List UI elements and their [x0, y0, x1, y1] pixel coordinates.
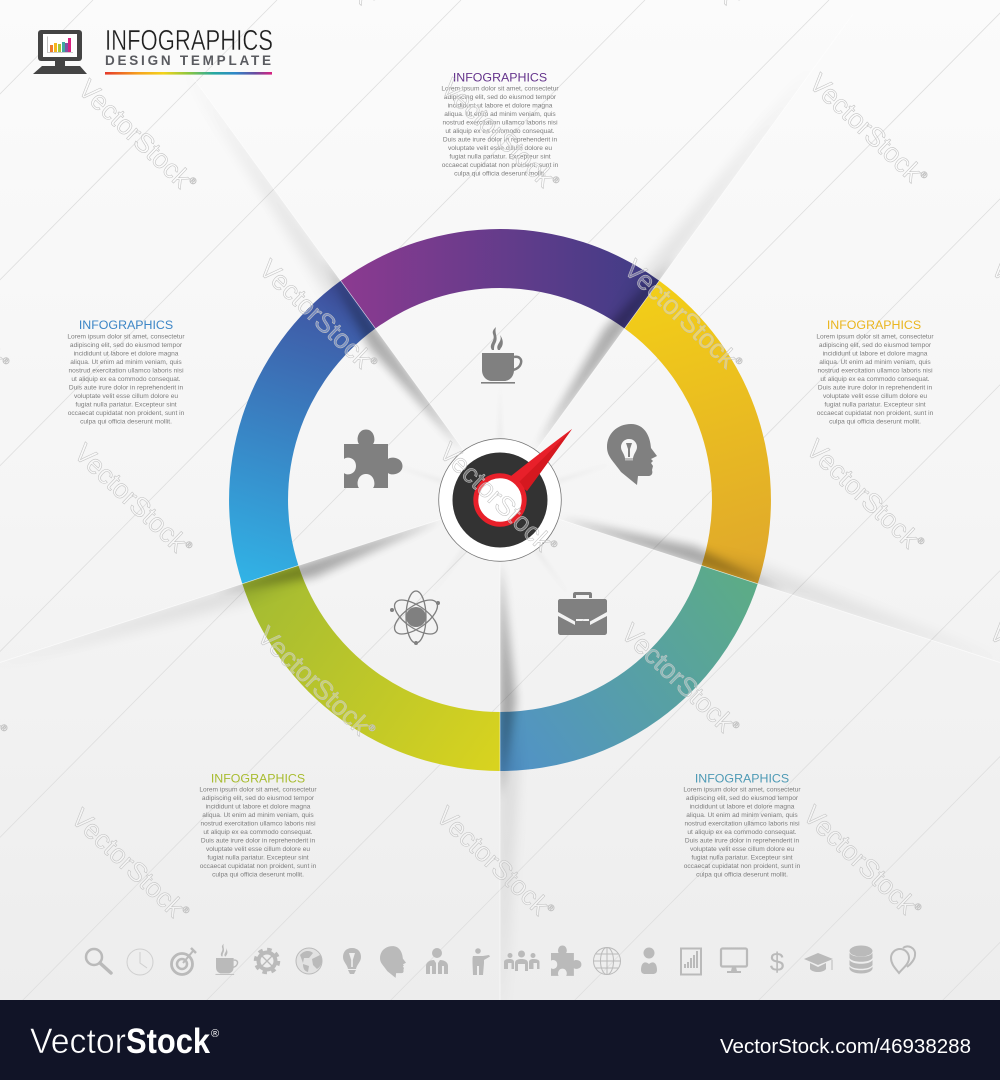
- watermark overlay: ®: [915, 535, 927, 547]
- text block: bottom right teal: Lorem ipsum dolor sit amet, consectetur: [683, 786, 801, 793]
- needle: [511, 429, 572, 491]
- header: monitor icon: [33, 30, 87, 74]
- text block: bottom left lime: ut aliquip ex ea commodo consequat.: [203, 829, 313, 836]
- watermark overlay: VectorStock: [65, 803, 190, 923]
- text block: top purple: culpa qui officia deserunt mollit.: [454, 170, 546, 177]
- text block: left blue: [67, 318, 185, 425]
- text block: top purple: incididunt ut labore et dolore magna: [448, 102, 553, 109]
- watermark overlay: ®: [730, 719, 742, 731]
- text block: left blue: fugiat nulla pariatur. Excepteur sint: [75, 401, 177, 408]
- icon: light bulb: [343, 948, 361, 974]
- icon: head with light bulb: [607, 424, 657, 485]
- icon: earth globe: [296, 948, 322, 974]
- text block: left blue: INFOGRAPHICS: [79, 318, 173, 332]
- text block: bottom right teal: occaecat cupidatat non proident, sunt in: [684, 863, 801, 870]
- header: title: INFOGRAPHICS: [105, 25, 273, 57]
- watermark overlay: VectorStock: [618, 254, 743, 374]
- icon: target: [172, 948, 196, 974]
- icon: tablet chart: [681, 948, 701, 974]
- watermark overlay: VectorStock: [803, 68, 928, 188]
- icon: dollar sign: $: [770, 947, 785, 977]
- watermark overlay: VectorStock: [433, 437, 558, 557]
- segment: purple top: [341, 229, 659, 328]
- icon: group of people: [504, 950, 540, 971]
- watermark overlay: ®: [912, 901, 924, 913]
- text block: top purple: Lorem ipsum dolor sit amet, consectetur: [441, 85, 559, 92]
- watermark overlay: ®: [733, 355, 745, 367]
- text block: top purple: occaecat cupidatat non proident, sunt in: [442, 162, 559, 169]
- text block: bottom left lime: culpa qui officia deserunt mollit.: [212, 871, 304, 878]
- text block: right yellow: Duis aute irure dolor in reprehenderit in: [818, 384, 933, 391]
- text block: left blue: aliqua. Ut enim ad minim veniam, quis: [70, 359, 182, 366]
- text block: left blue: ut aliquip ex ea commodo consequat.: [71, 376, 181, 383]
- icon: gear: [256, 950, 278, 972]
- watermark overlay: ®: [368, 355, 380, 367]
- logo: [30, 1022, 219, 1061]
- text block: bottom left lime: Duis aute irure dolor in reprehenderit in: [201, 837, 316, 844]
- icon: clock: [127, 949, 153, 975]
- watermark overlay: VectorStock: [253, 254, 378, 374]
- text block: left blue: occaecat cupidatat non proident, sunt in: [68, 410, 185, 417]
- watermark overlay: VectorStock: [615, 618, 740, 738]
- logo: Vector: [30, 1022, 126, 1061]
- text block: top purple: Duis aute irure dolor in reprehenderit in: [443, 136, 558, 143]
- watermark overlay: VectorStock: [800, 434, 925, 554]
- text block: left blue: nostrud exercitation ullamco laboris nisi: [68, 367, 184, 374]
- text block: right yellow: occaecat cupidatat non proident, sunt in: [817, 410, 934, 417]
- text block: right yellow: nostrud exercitation ullamco laboris nisi: [817, 367, 933, 374]
- watermark overlay: VectorStock: [251, 621, 376, 741]
- text block: bottom right teal: incididunt ut labore et dolore magna: [690, 803, 795, 810]
- ring of five coloured segments: [229, 229, 771, 771]
- hub with red needle: [439, 429, 572, 561]
- watermark overlay: VectorStock: [435, 73, 560, 193]
- text block: right yellow: voluptate velit esse cillum dolore eu: [823, 393, 927, 400]
- text block: bottom right teal: INFOGRAPHICS: [695, 772, 789, 786]
- text block: top purple: ut aliquip ex ea commodo consequat.: [445, 128, 555, 135]
- icon: computer monitor: [721, 948, 747, 973]
- watermark overlay: ®: [550, 174, 562, 186]
- bottom icon row: [86, 944, 915, 978]
- text block: right yellow: culpa qui officia deserunt mollit.: [829, 418, 921, 425]
- text block: right yellow: Lorem ipsum dolor sit amet, consectetur: [816, 333, 934, 340]
- icon: user: [641, 948, 657, 974]
- text block: bottom left lime: nostrud exercitation ullamco laboris nisi: [200, 820, 316, 827]
- icon: small head: [380, 946, 406, 978]
- text block: bottom left lime: Lorem ipsum dolor sit amet, consectetur: [199, 786, 317, 793]
- text block: bottom left lime: voluptate velit esse cillum dolore eu: [206, 846, 310, 853]
- text block: bottom left lime: adipiscing elit, sed do eiusmod tempor: [202, 795, 315, 802]
- text block: bottom right teal: voluptate velit esse cillum dolore eu: [690, 846, 794, 853]
- watermark overlay: ®: [187, 175, 199, 187]
- watermark overlay: VectorStock: [797, 800, 922, 920]
- watermark overlay: ®: [0, 355, 12, 367]
- icon: graduation cap: [804, 953, 833, 972]
- text block: bottom right teal: nostrud exercitation ullamco laboris nisi: [684, 820, 800, 827]
- text block: left blue: adipiscing elit, sed do eiusmod tempor: [70, 342, 183, 349]
- watermark overlay: ®: [183, 539, 195, 551]
- image id: VectorStock.com/46938288: [720, 1035, 971, 1058]
- text block: right yellow: incididunt ut labore et dolore magna: [823, 350, 928, 357]
- text block: bottom left lime: occaecat cupidatat non proident, sunt in: [200, 863, 317, 870]
- text block: right yellow: ut aliquip ex ea commodo consequat.: [820, 376, 930, 383]
- header: title: DESIGN TEMPLATE: [105, 53, 271, 68]
- text block: left blue: voluptate velit esse cillum dolore eu: [74, 393, 178, 400]
- segment: lime bottom left: [242, 566, 500, 771]
- watermark overlay: ®: [918, 169, 930, 181]
- text block: top purple: aliqua. Ut enim ad minim veniam, quis: [444, 111, 556, 118]
- icon: coins: [850, 946, 872, 974]
- header: title: [105, 25, 273, 75]
- footer banner: [0, 1000, 1000, 1080]
- text block: top purple: nostrud exercitation ullamco laboris nisi: [442, 119, 558, 126]
- text block: right yellow: adipiscing elit, sed do eiusmod tempor: [819, 342, 932, 349]
- text block: bottom right teal: Duis aute irure dolor in reprehenderit in: [685, 837, 800, 844]
- watermark overlay: ®: [545, 902, 557, 914]
- watermark overlay: VectorStock: [430, 801, 555, 921]
- text block: bottom right teal: fugiat nulla pariatur. Excepteur sint: [691, 854, 793, 861]
- text block: top purple: voluptate velit esse cillum dolore eu: [448, 145, 552, 152]
- icon: puzzle piece: [344, 430, 402, 488]
- text block: top purple: [441, 70, 559, 177]
- text block: top purple: INFOGRAPHICS: [453, 70, 547, 84]
- watermark overlay: ®: [548, 538, 560, 550]
- text block: right yellow: fugiat nulla pariatur. Excepteur sint: [824, 401, 926, 408]
- logo: Stock: [126, 1022, 210, 1061]
- text block: top purple: adipiscing elit, sed do eiusmod tempor: [444, 94, 557, 101]
- icon: small coffee cup: [215, 944, 238, 975]
- text block: left blue: culpa qui officia deserunt mollit.: [80, 418, 172, 425]
- text block: bottom left lime: INFOGRAPHICS: [211, 772, 305, 786]
- watermark overlay: ®: [366, 722, 378, 734]
- segment: teal bottom right: [500, 566, 758, 771]
- watermark overlay: ®: [180, 904, 192, 916]
- icon: map pins: [891, 946, 915, 973]
- text block: bottom left lime: aliqua. Ut enim ad minim veniam, quis: [202, 812, 314, 819]
- watermark overlay: VectorStock: [68, 438, 193, 558]
- watermark overlay: VectorStock: [72, 74, 197, 194]
- text block: left blue: Lorem ipsum dolor sit amet, consectetur: [67, 333, 185, 340]
- segment: blue left: [229, 281, 375, 584]
- logo: ®: [211, 1028, 219, 1040]
- text block: bottom right teal: adipiscing elit, sed do eiusmod tempor: [686, 795, 799, 802]
- icon: businessman: [426, 948, 448, 974]
- text block: top purple: fugiat nulla pariatur. Excepteur sint: [449, 153, 551, 160]
- icon: small puzzle piece: [551, 945, 581, 976]
- text block: right yellow: INFOGRAPHICS: [827, 318, 921, 332]
- text block: left blue: Duis aute irure dolor in reprehenderit in: [69, 384, 184, 391]
- text block: bottom right teal: culpa qui officia deserunt mollit.: [696, 871, 788, 878]
- segment: yellow right: [625, 281, 771, 584]
- text block: bottom right teal: ut aliquip ex ea commodo consequat.: [687, 829, 797, 836]
- icon: presenter: [472, 948, 490, 975]
- faint rays from the hub: [385, 380, 615, 598]
- text block: right yellow: [816, 318, 934, 425]
- icon: atom: [389, 591, 443, 645]
- text block: bottom left lime: incididunt ut labore et dolore magna: [206, 803, 311, 810]
- text block: bottom left lime: [199, 772, 317, 878]
- icon: wire globe: [594, 948, 620, 974]
- text block: right yellow: aliqua. Ut enim ad minim veniam, quis: [819, 359, 931, 366]
- icon: magnifier: [86, 949, 111, 973]
- text block: left blue: incididunt ut labore et dolore magna: [74, 350, 179, 357]
- text block: bottom right teal: aliqua. Ut enim ad minim veniam, quis: [686, 812, 798, 819]
- text block: bottom right teal: [683, 772, 801, 878]
- text block: bottom left lime: fugiat nulla pariatur. Excepteur sint: [207, 854, 309, 861]
- icon: briefcase: [558, 592, 607, 635]
- icon: coffee cup: [481, 327, 521, 384]
